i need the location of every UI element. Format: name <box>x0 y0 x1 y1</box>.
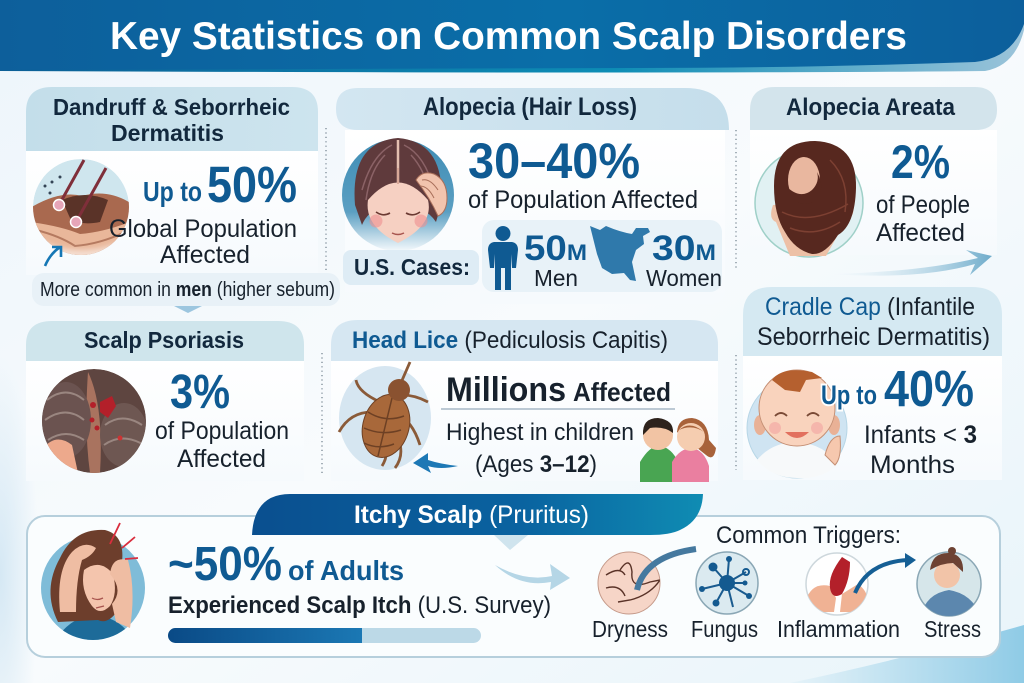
icon: us map <box>590 226 650 281</box>
heading: alopecia: Alopecia (Hair Loss) <box>423 93 637 121</box>
divider dots <box>322 128 736 476</box>
stat: up to 50%: 50% <box>207 156 297 213</box>
text: highest in children: (Ages 3–12) <box>475 451 597 478</box>
stat: up to 40%: Up to <box>821 380 877 410</box>
icon: smiling baby <box>747 370 847 478</box>
stat: 50M men <box>524 229 587 291</box>
progress bar <box>168 628 481 643</box>
panel: cradle cap <box>743 287 1002 480</box>
icon: man <box>488 226 518 290</box>
title banner <box>0 0 1024 72</box>
arrow: small blue <box>45 247 61 266</box>
title: Key Statistics on Common Scalp Disorders <box>110 15 907 58</box>
text: of population affected: of Population <box>155 417 289 445</box>
text: of people affected <box>876 191 970 247</box>
arrow: to louse <box>413 453 458 473</box>
callout: more common in men <box>32 273 340 306</box>
panel: itchy scalp <box>27 494 1000 657</box>
panel: alopecia hair loss <box>336 88 729 304</box>
icon: inflammation <box>806 553 916 615</box>
text: of population affected: of Population Affected <box>468 186 698 214</box>
pointer <box>172 305 204 313</box>
heading: itchy scalp: Itchy Scalp (Pruritus) <box>354 501 589 529</box>
stat: 30M women: 30M <box>652 229 716 268</box>
heading: cradle cap <box>743 287 1002 356</box>
pointer <box>494 535 528 550</box>
stat: 30M women: Women <box>646 265 722 291</box>
icon: woman scratching head <box>41 523 145 650</box>
heading: cradle cap: Cradle Cap (Infantile <box>765 293 975 321</box>
icon: children <box>640 418 716 482</box>
icon: fungus <box>696 552 758 614</box>
stat: 50M men: Men <box>534 265 578 291</box>
icon: head with bald patch <box>755 141 863 257</box>
label: us cases <box>343 250 479 285</box>
icon: stress <box>917 547 982 620</box>
text: highest in children: Highest in children <box>446 419 634 446</box>
text: experienced scalp itch: Experienced Scalp Itch (U.S. Survey) <box>168 592 551 619</box>
icon: louse <box>339 362 431 470</box>
text: global population affected: Affected <box>160 241 250 269</box>
heading: scalp psoriasis <box>26 321 304 361</box>
stat: 2%: 2% <box>891 135 950 188</box>
stat: 50M men: 50M <box>524 229 587 268</box>
stat: millions affected: Millions <box>446 371 566 409</box>
heading: head lice <box>331 320 718 361</box>
text: of population affected: Affected <box>177 445 266 473</box>
arrow: to cradle cap <box>830 250 992 276</box>
heading: dandruff <box>26 87 318 151</box>
heading: common triggers: Common Triggers: <box>716 522 901 549</box>
labels: triggers: Dryness <box>592 616 668 642</box>
stat: 3%: 3% <box>170 366 230 419</box>
arrow: to triggers <box>495 564 570 590</box>
heading: dandruff: Dermatitis <box>111 120 224 146</box>
heading: cradle cap: Seborrheic Dermatitis) <box>757 323 990 351</box>
stat: about 50% of adults <box>168 538 404 591</box>
heading: alopecia areata: Alopecia Areata <box>786 94 956 121</box>
icon: dryness <box>598 549 696 614</box>
heading: alopecia <box>336 88 729 130</box>
labels: triggers <box>592 616 981 642</box>
icon: woman with thinning hair <box>342 138 454 251</box>
stat: 30-40%: 30–40% <box>468 133 640 189</box>
label: us cases: U.S. Cases: <box>354 254 470 280</box>
labels: triggers: Stress <box>924 616 981 642</box>
icon: scalp cross-section <box>33 159 129 255</box>
panel: alopecia areata <box>750 87 997 276</box>
text: of people affected: of People <box>876 191 970 219</box>
panel: scalp psoriasis <box>26 321 304 481</box>
heading: alopecia areata <box>750 87 997 130</box>
stat: up to 40% <box>821 360 974 417</box>
callout: more common in men: More common in men (higher sebum) <box>40 279 335 301</box>
text: global population affected <box>109 215 297 269</box>
text: global population affected: Global Population <box>109 215 297 243</box>
stat: millions affected <box>446 371 671 409</box>
text: infants under 3 months: Infants < 3 <box>864 421 977 449</box>
stat: 30M women <box>646 229 722 291</box>
stat: up to 40%: 40% <box>884 360 974 417</box>
icon: psoriasis scalp <box>41 369 148 473</box>
heading: itchy scalp <box>252 494 703 535</box>
labels: triggers: Inflammation <box>777 616 900 642</box>
heading: scalp psoriasis: Scalp Psoriasis <box>84 327 244 353</box>
text: infants under 3 months <box>864 421 977 479</box>
stat: up to 50%: Up to <box>143 176 202 207</box>
stat: about 50% of adults: of Adults <box>288 555 404 586</box>
stat: about 50% of adults: ~50% <box>168 538 282 591</box>
text: of people affected: Affected <box>876 219 965 247</box>
heading: head lice: Head Lice (Pediculosis Capitis) <box>352 327 668 354</box>
stat: up to 50% <box>143 156 297 213</box>
panel: head lice <box>331 320 718 482</box>
panel: dandruff and seborrheic dermatitis <box>26 87 340 313</box>
panel: us cases <box>343 220 722 292</box>
labels: triggers: Fungus <box>691 616 758 642</box>
stat: millions affected: Affected <box>573 377 671 407</box>
text: highest in children <box>446 419 634 478</box>
rule <box>441 408 675 410</box>
text: of population affected <box>155 417 289 473</box>
text: infants under 3 months: Months <box>870 451 955 479</box>
heading: dandruff: Dandruff & Seborrheic <box>53 94 290 120</box>
